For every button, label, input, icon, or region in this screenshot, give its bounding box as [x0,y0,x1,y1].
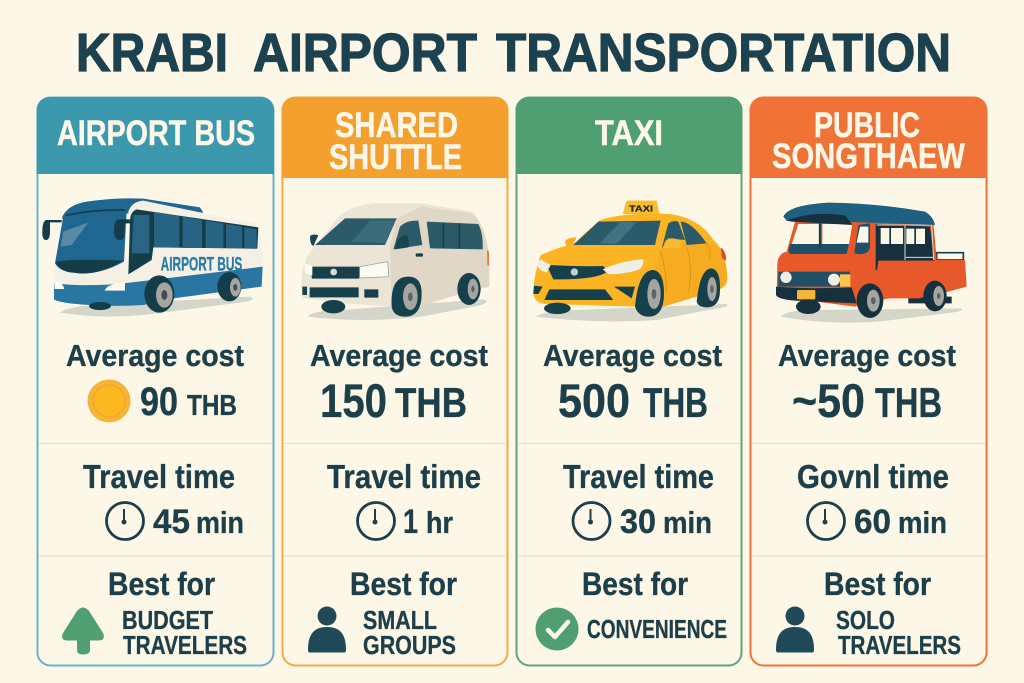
header: shared shuttle: SHARED [335,106,458,145]
average cost label: Average cost [778,338,956,373]
best for label: Best for [350,566,457,602]
illustration: songthaew truck [776,203,967,323]
best for label: Best for [582,566,688,602]
icon: clock [106,502,144,540]
title: AIRPORT [253,23,477,83]
average cost label: Average cost [310,338,488,373]
best for value: SMALL [363,605,437,635]
travel time value: 45 [153,503,190,541]
best for value [122,605,247,660]
travel time value: hr [426,505,453,540]
best for value: GROUPS [363,630,456,660]
travel time value [854,503,947,541]
best for value [363,605,456,660]
header: public songthaew: PUBLIC [814,106,920,145]
panel: taxi [516,97,742,666]
best for label: Best for [108,566,215,602]
best for value [836,605,961,660]
header: public songthaew: SONGTHAEW [772,137,965,176]
icon: clock [808,502,844,540]
travel time value [153,503,244,541]
travel time value: 1 [403,503,418,541]
header: shared shuttle [282,97,508,178]
cost value [140,380,237,424]
cost value: THB [187,390,237,422]
icon: clock [358,502,394,540]
illustration: shuttle van [302,203,489,320]
icon: gold coin [88,380,130,422]
icon: person [776,606,814,652]
best for value: SOLO [836,605,895,635]
title [76,23,951,83]
cost value: THB [643,379,708,426]
best for value: BUDGET [122,605,213,635]
cost value: THB [395,379,467,426]
best for value: CONVENIENCE [587,614,727,644]
travel time value [403,503,453,541]
travel time label: Travel time [327,458,481,495]
header: airport bus [36,97,274,174]
travel time label: Govnl time [797,458,949,495]
title: KRABI [76,23,228,83]
illustration: taxi [533,201,727,321]
travel time label: Travel time [563,458,714,495]
cost value: 500 [558,374,630,427]
travel time value: 30 [620,503,656,541]
icon: person [308,606,346,652]
header: taxi [516,97,742,174]
panel: airport bus [36,97,274,666]
travel time value: 60 [854,503,891,541]
travel time value: min [663,505,712,540]
cost value [558,374,708,427]
bus side lettering: AIRPORT BUS [161,254,242,275]
cost value [320,374,467,427]
average cost label: Average cost [543,338,722,373]
travel time value [620,503,712,541]
travel time value: min [196,505,244,540]
best for value: TRAVELERS [123,630,247,660]
icon: green tree arrow [62,608,104,654]
illustration: taxi: TAXI [629,203,653,213]
panel: shared shuttle [282,97,508,666]
cost value: ~50 [792,374,865,427]
cost value [792,374,942,427]
best for label: Best for [824,566,931,602]
cost value: 150 [320,374,387,427]
travel time label: Travel time [83,458,235,495]
travel time value: min [898,505,947,540]
title: TRANSPORTATION [496,23,951,83]
icon: clock [573,502,610,540]
header: public songthaew [750,97,987,178]
header: shared shuttle: SHUTTLE [329,138,462,177]
best for value: TRAVELERS [838,630,961,660]
average cost label: Average cost [66,338,244,373]
header: airport bus: AIRPORT BUS [57,114,255,153]
cost value: 90 [140,380,178,424]
icon: check circle [536,608,578,650]
header: taxi: TAXI [595,114,663,153]
illustration: airport bus [42,198,263,317]
panel: public songthaew [750,97,987,666]
cost value: THB [875,379,942,426]
